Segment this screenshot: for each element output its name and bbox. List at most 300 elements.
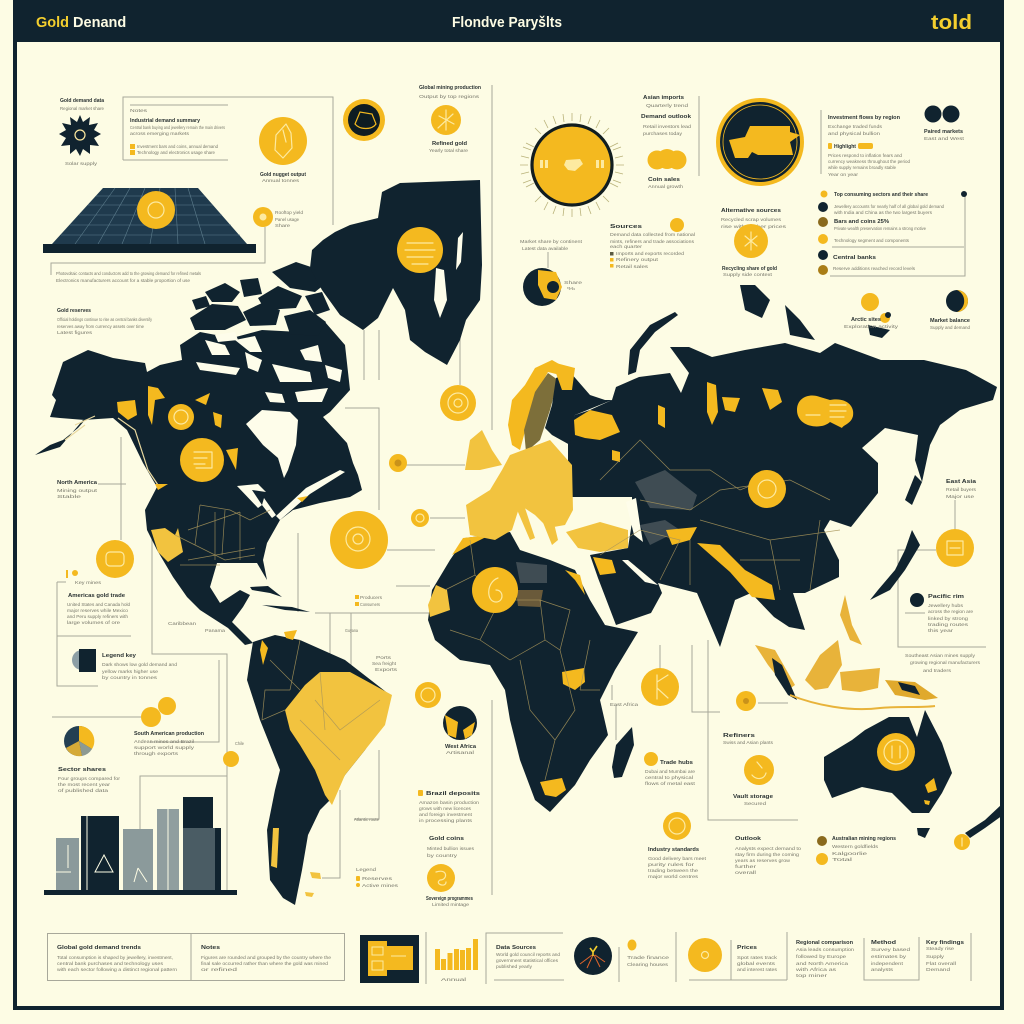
callout: small coin note [253, 207, 303, 229]
panel: icon list: Reserve additions reached record levels [833, 266, 916, 272]
map: Chile yellow strip [271, 828, 279, 868]
text block: pie note: of published data [58, 788, 108, 794]
map: US state lines [188, 512, 380, 760]
bar glyphs [56, 809, 168, 890]
text block: outlook [735, 836, 801, 876]
panel: Pacific note: across the region are [928, 609, 973, 615]
panel: coin and bottom note: Spot rates track [737, 955, 778, 961]
callout: small coin note: Rooftop yield [275, 210, 303, 216]
icon: gold nugget badge [259, 117, 307, 184]
map: Caribbean islands [250, 586, 310, 612]
icon: large dark medallion [716, 98, 804, 186]
callout: small coin caption: Trade finance [627, 955, 669, 961]
text block: South Atlantic note: Brazil deposits [426, 791, 480, 797]
panel: palm badge note: Recycling share of gold [722, 266, 777, 272]
panel: bottom text box: final sale occurred rather than where the gold was mined [201, 961, 328, 967]
list icon 3 [818, 234, 828, 244]
text block: Americas note: and Peru supply refiners with [67, 614, 128, 620]
panel: middle note with bullets: Demand data collected from national [610, 232, 695, 238]
text block: bottom column two [864, 937, 919, 980]
text block: left note [57, 308, 152, 336]
panel: Indian Ocean note: Dubai and Mumbai are [645, 769, 695, 775]
panel: medal note: Good delivery bars meet [648, 856, 707, 862]
panel: coin and bottom note [688, 932, 787, 980]
icon: half moon pie: Market balance [930, 318, 970, 324]
panel: sunburst note [59, 98, 105, 167]
badge: Mexico side [96, 540, 134, 578]
map: Colombia yellow coast [260, 630, 297, 665]
callout: globe segment: % [567, 286, 576, 292]
text block: ocean captions [723, 733, 774, 807]
icon: gold nugget badge: Gold nugget output [260, 172, 306, 178]
badge: Russia [797, 396, 853, 428]
text block: left note: reserves away from currency assets over time [57, 324, 144, 330]
panel: coin note south: Minted bullion issues [427, 846, 475, 852]
text block: South Atlantic note: grows with new licences [419, 806, 472, 812]
callout: globe picture disc [443, 706, 477, 756]
text block: bottom column two: analysts [871, 967, 894, 973]
legend: Australia icons: Australian mining regions [832, 836, 896, 842]
icon: coin [427, 864, 455, 892]
panel: bottom text middle: government statistical offices [496, 958, 559, 964]
badge: Japan east [936, 529, 974, 567]
text block: bottom column three: Steady rise [926, 946, 954, 952]
panel: top centre note [419, 85, 482, 154]
callout: globe picture disc: West Africa [445, 744, 477, 750]
text block: panel caption: Photovoltaic contacts and conductors add to the growing demand for refined metals [56, 271, 201, 277]
marker: location pin [66, 570, 102, 586]
panel: icon list: Central banks [833, 255, 876, 261]
text block: panel caption: Electronics manufacturers account for a stable proportion of use [56, 278, 190, 284]
text block: bottom column three: Key findings [926, 940, 964, 946]
badge: Africa [472, 567, 518, 613]
map: central Africa yellow [562, 668, 585, 690]
text block: east Asia note: East Asia [946, 479, 977, 485]
text block: Americas note: major reserves while Mexico [67, 608, 128, 614]
callout: globe picture disc: Artisanal [446, 750, 474, 756]
text block: South Atlantic note: and foreign investment [419, 812, 473, 818]
title right: told [931, 12, 972, 34]
panel: boxed summary: Central bank buying and jewellery remain the main drivers [130, 125, 225, 131]
map: Arctic Russia islands [740, 285, 890, 340]
legend: Falkland bullets [356, 867, 399, 889]
text block: outlook: further [735, 864, 757, 870]
text block: South Atlantic note: Amazon basin production [419, 800, 479, 806]
panel: bottom text middle: published yearly [496, 964, 533, 970]
panel: Pacific note: linked by strong [928, 616, 968, 622]
map: Siberia yellow patches [612, 382, 782, 462]
text block: Indonesia note: and traders [923, 668, 952, 674]
text block: Cape label: Atlantic route [354, 817, 379, 823]
panel: coin note south: Limited mintage [432, 902, 469, 908]
panel: coin and bottom note: and interest rates [737, 967, 778, 973]
panel: bottom text box: central bank purchases and technology uses [57, 961, 164, 967]
icon: globe disc [523, 268, 562, 306]
legend: Australia icons: Kalgoorlie [832, 851, 868, 857]
panel: bottom text box: or refined [201, 967, 238, 973]
panel: centre top note: Quarterly trend [646, 103, 688, 109]
map: South America [247, 635, 390, 905]
text block: left note: Latest figures [57, 330, 93, 336]
text block: outlook: stay firm during the coming [735, 852, 799, 858]
callout: small coin note: Share [275, 223, 290, 229]
panel: top right note: while supply remains broadly stable [828, 165, 896, 171]
map: Himalaya yellow belt [666, 527, 775, 600]
panel: centre top note: Annual growth [648, 184, 683, 190]
marker: tiny label: Chile [235, 741, 244, 747]
text block: bottom column one: and North America [796, 961, 848, 967]
panel: coin and bottom note: Prices [737, 945, 757, 951]
panel: bottom text box: Figures are rounded and grouped by the country where the [201, 955, 331, 961]
panel: Indian Ocean note: flows of metal east [645, 781, 696, 787]
panel: half circle legend: Legend key [102, 653, 137, 659]
callout: globe segment: Market share by continent [520, 239, 583, 245]
map: Brazil yellow [285, 672, 392, 805]
map: Italy and Balkans [515, 505, 558, 545]
map: Sahara brown patch [516, 590, 543, 607]
text block: pie note [58, 767, 120, 794]
text block: Indian Ocean label: East Africa [610, 702, 638, 708]
header bar [13, 0, 1004, 42]
badge: Australia [877, 733, 915, 771]
map: Kola yellow [552, 362, 575, 390]
map: Borneo yellow [805, 640, 842, 690]
title left: Gold Denand [36, 15, 126, 31]
icon: twin circles: Paired markets [924, 129, 963, 135]
text block: Indonesia note: growing regional manufacturers [910, 660, 981, 666]
legend: Falkland bullets: Legend [356, 867, 376, 873]
map: Malaya dark stripe [772, 658, 797, 700]
text block: bottom column one: top miner [796, 973, 828, 979]
map: Eurasia [568, 343, 997, 647]
panel: bottom text middle: Data [496, 945, 511, 951]
panel: half circle legend [72, 649, 177, 681]
text block: west Atlantic labels: Sea freight [372, 661, 397, 667]
text block: west Atlantic labels [168, 621, 398, 673]
panel: centre top note: purchases today [643, 131, 683, 137]
map: Canada yellow patches [117, 386, 308, 502]
text block: Indonesia note: Southeast Asian mines supply [905, 653, 976, 659]
panel: Pacific note: Jewellery hubs [928, 603, 964, 609]
text block: west Atlantic labels: Guyana [345, 628, 358, 634]
map: Persian Gulf [622, 560, 658, 585]
marker: location pin: Key mines [75, 580, 102, 586]
text block: west Atlantic labels: Exports [375, 667, 398, 673]
panel: middle note with bullets: mints, refiners and trade associations [610, 239, 695, 245]
icon: burst badge [734, 224, 768, 258]
text block: South America west note: South American production [134, 731, 205, 737]
legend: Atlantic bullets: Producers [360, 595, 383, 601]
text block: South America west note: support world supply [134, 745, 195, 751]
icon: gold bars on dark tile [360, 935, 419, 983]
panel: sunburst note: Regional market share [60, 106, 104, 112]
panel: middle note with bullets: Refinery output [616, 257, 659, 263]
map: Madagascar [612, 727, 634, 778]
panel: middle note with bullets: Sources [610, 224, 642, 230]
map: Novaya Zemlya [628, 312, 678, 375]
map: Great Lakes [237, 470, 345, 520]
panel: top right note [828, 115, 910, 178]
legend: Australia icons [816, 836, 896, 865]
panel: sunburst note: Gold demand data [60, 98, 105, 104]
panel: boxed summary: Investment bars and coins, annual demand [137, 144, 218, 150]
legend: Atlantic bullets: Consumers [360, 602, 380, 608]
text block: South Atlantic note: in processing plants [419, 818, 473, 824]
text block: Americas note: Americas gold trade [68, 593, 125, 599]
title centre: Flondve Paryšlts [452, 15, 562, 31]
text block: left note: Gold reserves [57, 308, 91, 314]
chart: bar chart [44, 797, 237, 895]
text block: Americas note: large volumes of ore [67, 620, 120, 626]
panel: icon list: Private wealth preservation remains a strong motive [834, 226, 926, 232]
panel: centre top note: Demand outlook [641, 114, 692, 120]
text block: South America west note: through exports [134, 751, 179, 757]
map: Tasmania [917, 828, 930, 838]
text block: Alaska note [57, 480, 98, 500]
map: country borders [175, 440, 840, 780]
text block: pie note: Sector shares [58, 767, 106, 773]
text block: west Atlantic labels: Ports [376, 655, 392, 661]
panel: middle note with bullets: each quarter [610, 244, 642, 250]
panel: sunburst note: Solar supply [65, 161, 98, 167]
panel: half circle legend: by country in tonnes [102, 675, 158, 681]
text block: bottom column one: with Africa as [796, 967, 837, 973]
legend: Falkland bullets: Reserves [362, 876, 393, 882]
icon: star badge [431, 105, 461, 135]
text block: Americas note [67, 593, 130, 626]
panel: top right note: currency weakness throughout the period [828, 159, 910, 165]
text block: bottom column one: followed by Europe [796, 954, 846, 960]
panel: icon list: with India and China as the two largest buyers [834, 210, 933, 216]
icon: radiating gold sun [520, 113, 624, 217]
legend: Australia icons: Western goldfields [832, 844, 879, 850]
text block: pie note: Four groups compared for [58, 776, 120, 782]
panel: bottom text box: Notes [201, 945, 220, 951]
connector lines [51, 85, 986, 895]
list icon 2 [818, 217, 828, 227]
icon: half moon pie [930, 290, 970, 331]
map: Europe [466, 440, 573, 540]
map: Greenland [310, 180, 482, 365]
panel: top right note: Investment flows by region [828, 115, 901, 121]
map: Hudson Bay [246, 410, 298, 478]
chart: bottom yellow bars [426, 932, 478, 984]
text block: ocean captions: Swiss and Asian plants [723, 740, 774, 746]
badge: panel coin [137, 191, 175, 229]
panel: boxed summary: across emerging markets [130, 131, 190, 137]
map: Falkland yellow islands [305, 872, 321, 897]
panel: Pacific note: Pacific rim [928, 594, 964, 600]
text block: bottom column two: Method [871, 940, 897, 946]
panel: medal note: purity rules for [648, 862, 695, 868]
map: Turkey yellow [566, 522, 628, 552]
map: southern Africa yellow [540, 778, 566, 797]
list icon 5 [818, 265, 828, 275]
map: Japan [870, 530, 920, 600]
panel: palm badge note: Recycled scrap volumes [721, 217, 782, 223]
text block: pie note: the most recent year [58, 782, 110, 788]
text block: South America west note: Andean mines and Brazil [134, 739, 194, 745]
icon: spiky sun [59, 115, 101, 156]
icon: twin circles [924, 106, 965, 142]
panel: bottom text middle: Sources [512, 945, 536, 951]
badge: China [748, 470, 786, 508]
panel: medal note: major world centres [648, 874, 699, 880]
panel: Pacific note [910, 593, 973, 634]
panel: boxed summary [130, 108, 225, 156]
text block: Alaska note: North America [57, 480, 98, 486]
badge: Atlantic mid 2 [411, 509, 429, 527]
panel: icon list: Bars and coins 25% [834, 219, 889, 225]
panel: Indian Ocean note: Trade hubs [660, 760, 693, 766]
badge: Atlantic large [330, 511, 388, 569]
panel: top right note: Exchange traded funds [828, 124, 883, 130]
panel: bottom text middle: World gold council reports and [496, 952, 560, 958]
text block: bottom column one: Asia leads consumption [796, 947, 854, 953]
map: Korea and north Pacific [905, 475, 922, 505]
icon: gold nugget badge: Annual tonnes [262, 178, 300, 184]
panel: coin note south: by country [427, 853, 458, 859]
panel: icon list: Technology segment and components [834, 238, 910, 244]
panel: top right note: Highlight [834, 144, 856, 150]
callout: arctic coin [844, 293, 899, 330]
text block: ocean captions: Refiners [723, 733, 755, 739]
panel: bottom text box [48, 933, 344, 980]
text block: outlook: Analysts expect demand to [735, 846, 801, 852]
map: Arctic islands [190, 262, 330, 336]
map: West Africa yellow [428, 585, 450, 617]
panel: half circle legend: yellow marks higher use [102, 669, 158, 675]
text block: east Asia note [946, 479, 977, 500]
badge: Pacific south [744, 755, 774, 785]
panel: bottom text box: Total consumption is shaped by jewellery, investment, [57, 955, 173, 961]
map: Sweden olive [524, 373, 558, 452]
panel: top right note: and physical bullion [828, 131, 880, 137]
badge: Atlantic mid 1 [389, 454, 407, 472]
panel: icon list: Jewellery accounts for nearly half of all global gold demand [834, 204, 944, 210]
map: arctic channels [196, 332, 342, 403]
panel: top centre note: Output by top regions [419, 94, 480, 100]
chart: pie [64, 726, 94, 756]
text block: outlook: overall [735, 870, 756, 876]
text block: bottom column two: independent [871, 961, 904, 967]
text block: west Atlantic labels: Panama [205, 628, 225, 634]
text block: bottom column one [796, 940, 854, 979]
panel: bottom text box: Global gold demand trends [57, 945, 141, 951]
badge: South America pin [223, 751, 239, 767]
icon: ringed dark coin [343, 99, 385, 141]
map: Malaya peninsula [755, 645, 795, 690]
text block: bottom column three: Supply [926, 954, 945, 960]
map: Java thin strip [790, 695, 935, 709]
map: North Africa yellow coast [452, 535, 585, 595]
badge: South Atlantic [415, 682, 441, 708]
icon: dark disc with rays [574, 937, 612, 975]
text block: bottom column three: Flat overall [926, 961, 956, 967]
text block: west Atlantic labels: Caribbean [168, 621, 196, 627]
panel: palm badge note: Alternative sources [721, 208, 781, 214]
bullet squares [130, 144, 135, 155]
panel: centre top note [641, 95, 692, 190]
callout: globe segment: Share [564, 280, 582, 286]
icon: three coins [648, 149, 686, 170]
map: Pacific coast streaks [65, 416, 158, 485]
panel: icon list: Top consuming sectors and their share [834, 192, 928, 198]
map: New Guinea yellow [885, 680, 938, 700]
text block: Indonesia note [905, 653, 981, 674]
text block: South Atlantic note [418, 790, 480, 824]
text block: bottom column two: Survey based [871, 947, 910, 953]
panel: boxed summary: Technology and electronics usage share [137, 150, 215, 156]
panel: centre top note: Coin sales [648, 177, 680, 183]
illustration: solar panel array [43, 188, 256, 253]
callout: arctic coin: Exploration activity [844, 324, 899, 330]
panel: top centre note: Refined gold [432, 141, 468, 147]
text block: outlook: Outlook [735, 836, 762, 842]
map: USA yellow mining region [151, 528, 183, 562]
text block: panel caption [56, 271, 201, 284]
map: New Guinea dark [898, 682, 920, 695]
panel: icon list [818, 190, 967, 275]
panel: top right note: Prices respond to inflation fears and [828, 153, 902, 159]
text block: left note: Official holdings continue to rise as central banks diversify [57, 317, 152, 323]
badge: Canada large [180, 438, 224, 482]
callout: small coin note: Panel usage [275, 217, 299, 223]
highlight tag [828, 143, 873, 149]
badge: Greenland [397, 227, 443, 273]
callout: globe segment: Latest data available [522, 246, 568, 252]
callout: globe segment [520, 239, 583, 306]
panel: middle note with bullets: Imports and exports recorded [616, 251, 684, 257]
legend: Falkland bullets: Active mines [362, 883, 399, 889]
panel: top right note: Year on year [828, 172, 858, 178]
badge: Canada small [168, 404, 194, 430]
map: Philippines yellow [840, 595, 862, 645]
text block: east Asia note: Major use [946, 494, 974, 500]
map: Scandinavia [508, 360, 575, 450]
panel: middle note with bullets: Retail sales [616, 264, 649, 270]
panel: Indian Ocean note [644, 752, 696, 787]
panel: palm badge note: rise with higher prices [721, 224, 787, 230]
map: NW Russia yellow [574, 410, 620, 440]
text block: bottom column three: Demand [926, 967, 950, 973]
panel: palm badge note [721, 208, 787, 278]
panel: top centre note: Yearly total share [429, 148, 468, 154]
text block: Americas note: United States and Canada hold [67, 602, 130, 608]
map: Central Asia grey patches [516, 470, 697, 583]
map: Australia [824, 710, 952, 813]
panel: centre top note: Retail investors lead [643, 124, 691, 130]
badge: Indian Ocean small [736, 691, 756, 711]
map: Greenland ice streaks [434, 232, 463, 318]
panel: Pacific note: trading routes [928, 622, 969, 628]
map: Africa [428, 532, 638, 812]
panel: boxed summary: Industrial demand summary [130, 118, 201, 124]
map badges [96, 227, 974, 850]
panel: medal note: trading between the [648, 868, 698, 874]
panel: Pacific note: this year [928, 628, 954, 634]
panel: bottom text box: with each sector following a distinct regional pattern [57, 967, 177, 973]
panel: half circle legend: Dark shows low gold demand and [102, 662, 177, 668]
map: Australia yellow deposits [924, 778, 937, 805]
text block: outlook: years as reserves grow [735, 858, 791, 864]
callout: small coin caption [619, 932, 676, 982]
callout: small coin caption: Clearing houses [627, 962, 669, 968]
panel: middle note with bullets [610, 218, 695, 270]
text block: Alaska note: Stable [57, 494, 82, 500]
text block: bottom column two: estimates by [871, 954, 907, 960]
panel: centre top note: Asian imports [643, 95, 684, 101]
